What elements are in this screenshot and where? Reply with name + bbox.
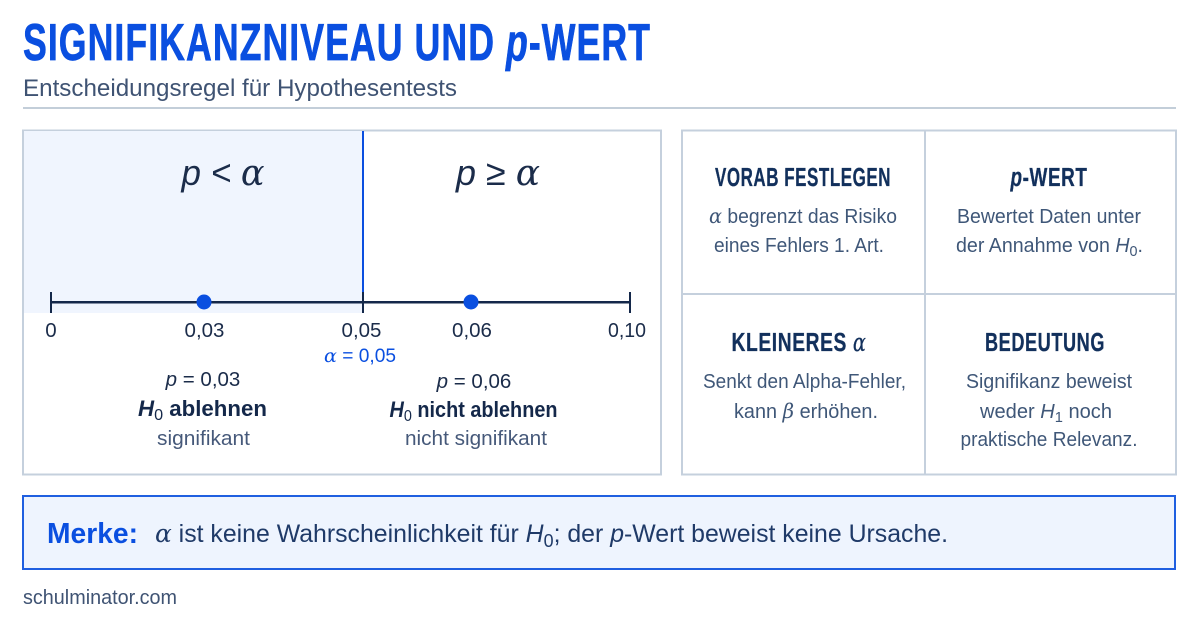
rejection region shading (24, 131, 363, 313)
callout label: Merke: (47, 518, 138, 550)
marker: p = 0,03 (196, 294, 212, 310)
alpha threshold label: α = 0,05 (324, 345, 396, 367)
cell: Kleineres alpha: Senkt den Alpha-Fehler, (703, 370, 906, 393)
cell: p-Wert: p-WERT (1010, 164, 1088, 192)
subtitle: Entscheidungsregel für Hypothesentests (23, 75, 457, 102)
axis labels: 0,06 (452, 319, 492, 342)
cell: Bedeutung: Signifikanz beweist (966, 370, 1132, 393)
alpha threshold line (362, 131, 364, 303)
axis labels: 0,10 (608, 319, 646, 342)
panel: number line decision rule (23, 130, 661, 474)
callout text: ; der (554, 520, 610, 548)
cell: Bedeutung: 1 (1055, 409, 1063, 426)
axis labels (45, 319, 646, 342)
callout text: 0 (544, 531, 554, 551)
callout text: p-Wert beweist keine Ursache. (610, 520, 950, 548)
cell: Bedeutung: praktische Relevanz. (960, 428, 1138, 451)
panel: info grid (682, 130, 1176, 474)
result: p = 0,03: signifikant (157, 427, 250, 450)
cell: Bedeutung: weder H (980, 400, 1055, 423)
cell: Kleineres alpha: KLEINERES α (732, 328, 866, 358)
result: p = 0,03: p = 0,03 (165, 368, 240, 391)
cell: Bedeutung: noch (1063, 400, 1112, 423)
cell: Kleineres alpha (703, 328, 906, 423)
marker: p = 0,06 (464, 294, 478, 310)
heading: p less than alpha: p < α (181, 152, 264, 194)
callout: Merke (23, 496, 1175, 569)
cell: p-Wert (956, 164, 1143, 260)
cell: Vorab festlegen: α begrenzt das Risiko (709, 204, 897, 228)
result: p = 0,03: ablehnen (163, 396, 267, 421)
result: p = 0,06: 0 (404, 408, 412, 425)
cell: p-Wert: 0 (1130, 243, 1138, 260)
axis labels: 0,03 (185, 319, 224, 342)
footer: source: schulminator.com (23, 586, 177, 609)
result: p = 0,06: nicht ablehnen (412, 397, 558, 422)
cell: Vorab festlegen: eines Fehlers 1. Art. (714, 234, 884, 257)
heading: p greater or equal alpha: p ≥ α (455, 152, 540, 194)
cell: Vorab festlegen (709, 164, 897, 257)
result: p = 0,06: H (390, 397, 405, 422)
axis labels: 0,05 (342, 319, 381, 342)
result: p = 0,03: 0 (154, 407, 163, 424)
result: p = 0,06 (390, 370, 558, 450)
result: p = 0,03 (138, 368, 267, 450)
number line axis (50, 292, 631, 313)
cell: Bedeutung: BEDEUTUNG (985, 329, 1105, 357)
cell: Bedeutung (960, 329, 1138, 451)
cell: Vorab festlegen: VORAB FESTLEGEN (715, 164, 891, 192)
result: p = 0,03: H (138, 396, 155, 421)
result: p = 0,06: p = 0,06 (436, 370, 511, 393)
callout text: α ist keine Wahrscheinlichkeit für H (155, 519, 544, 548)
cell: p-Wert: . (1138, 234, 1143, 257)
cell: Kleineres alpha: kann β erhöhen. (734, 399, 878, 423)
title: SIGNIFIKANZNIVEAU UND p-WERT (23, 14, 651, 72)
result: p = 0,06: nicht signifikant (405, 427, 547, 450)
axis labels: 0 (45, 319, 57, 342)
cell: p-Wert: der Annahme von H (956, 234, 1130, 257)
cell: p-Wert: Bewertet Daten unter (957, 205, 1141, 228)
